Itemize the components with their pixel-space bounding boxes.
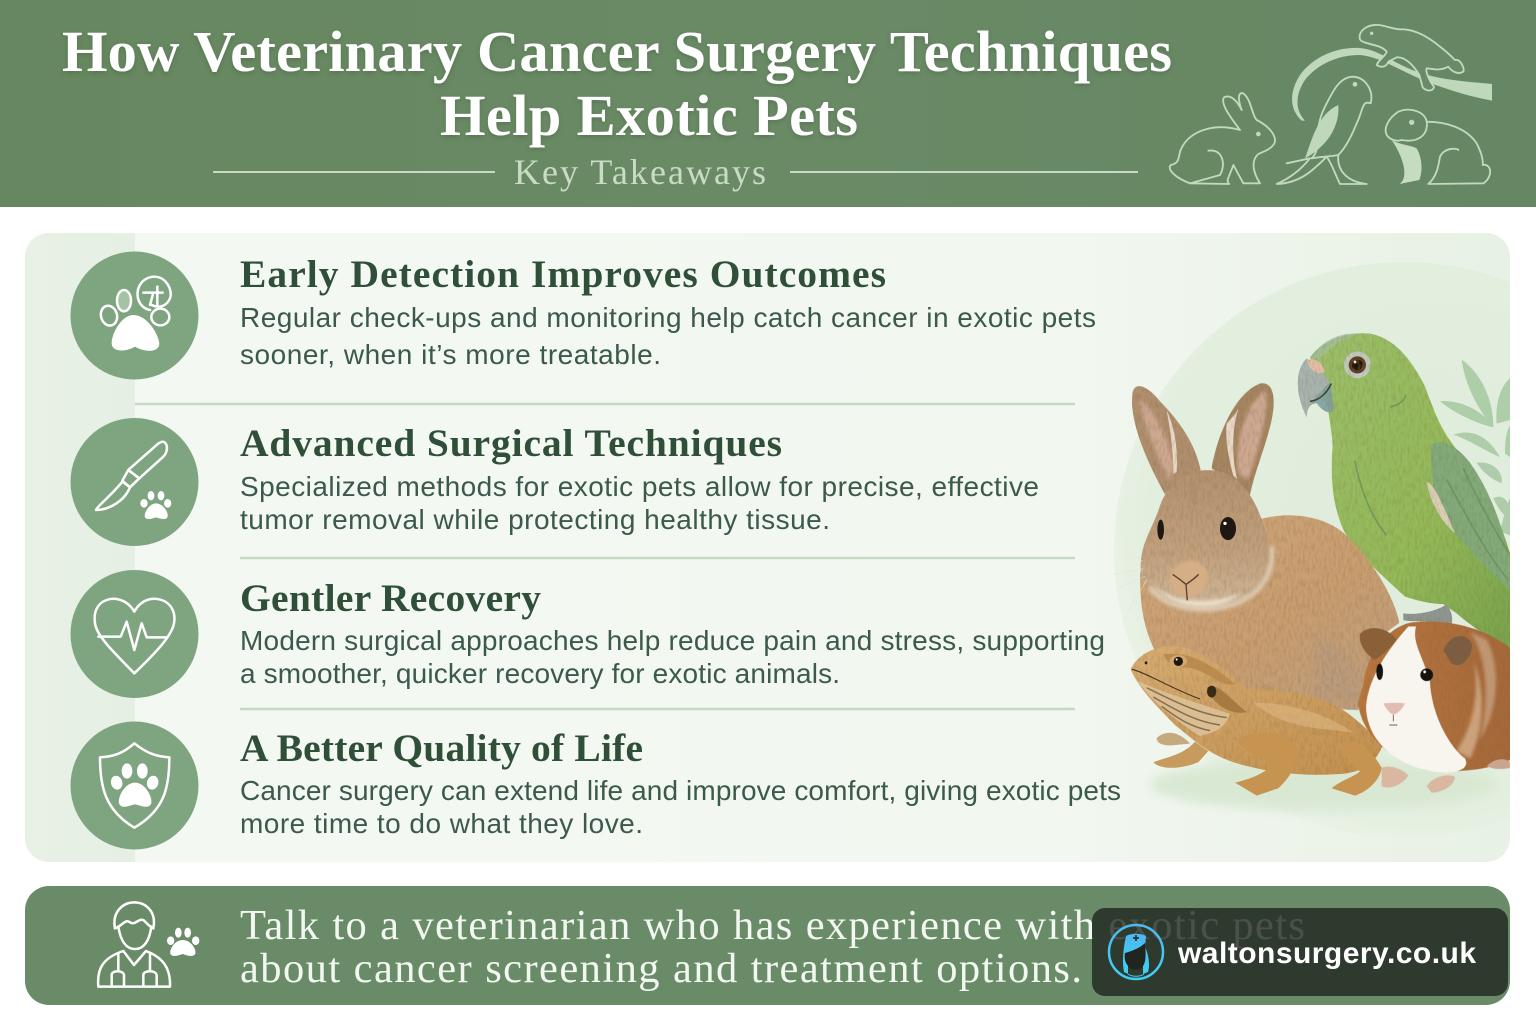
parrot	[1298, 333, 1513, 654]
icon: heart with pulse	[70, 570, 198, 698]
text block: Cancer surgery can extend life and improve comfort, giving exotic pets	[240, 775, 1121, 806]
illustration: rabbit, parrot, lizard and guinea pig	[1113, 262, 1536, 838]
watermark badge: waltonsurgery.co.uk: waltonsurgery.co.uk	[1177, 937, 1476, 970]
far legs	[1157, 733, 1190, 745]
text block: Regular check-ups and monitoring help catch cancer in exotic pets	[240, 302, 1096, 333]
heading: Advanced Surgical Techniques	[240, 421, 782, 465]
title: How Veterinary Cancer Surgery Techniques	[62, 19, 1172, 84]
rabbit outline	[1170, 93, 1275, 184]
icon: paw with magnifier	[70, 252, 198, 380]
title	[62, 19, 1172, 148]
icon: veterinarian with paw	[98, 902, 199, 987]
item 3: gentler recovery	[70, 570, 1105, 698]
text block: more time to do what they love.	[240, 808, 643, 839]
logo: nurse	[1109, 925, 1163, 979]
fern leaves	[1440, 360, 1510, 535]
bearded dragon	[1131, 646, 1383, 796]
guinea pig	[1358, 621, 1513, 793]
parrot outline	[1277, 77, 1371, 184]
text block: tumor removal while protecting healthy tissue.	[240, 504, 830, 535]
heading: Gentler Recovery	[240, 576, 541, 620]
call to action text: about cancer screening and treatment options.	[240, 945, 1082, 992]
item 4: quality of life	[70, 722, 1121, 850]
icon: scalpel and paw	[70, 418, 198, 546]
text block: Modern surgical approaches help reduce pain and stress, supporting	[240, 625, 1105, 656]
ground shadow	[1150, 758, 1497, 811]
panel: key takeaways	[25, 233, 1536, 862]
text block: a smoother, quicker recovery for exotic animals.	[240, 658, 840, 689]
item 2: advanced surgical techniques	[70, 418, 1039, 546]
text block: sooner, when it’s more treatable.	[240, 339, 661, 370]
icon: shield with paw	[70, 722, 198, 850]
header line art: exotic pets	[1170, 25, 1492, 184]
text block	[240, 471, 1039, 535]
branch	[1292, 48, 1492, 121]
text block	[240, 775, 1121, 839]
text block	[240, 625, 1105, 689]
header banner	[0, 0, 1536, 207]
heading: A Better Quality of Life	[240, 726, 643, 770]
text block: Specialized methods for exotic pets allow for precise, effective	[240, 471, 1039, 502]
footer call to action	[25, 886, 1510, 1005]
front legs	[1235, 733, 1298, 796]
rabbit	[1113, 383, 1399, 710]
text block	[240, 302, 1096, 370]
call to action text: Talk to a veterinarian who has experience with exotic pets	[240, 902, 1305, 949]
guinea pig outline	[1386, 110, 1490, 184]
title: Help Exotic Pets	[440, 83, 858, 148]
heading: Early Detection Improves Outcomes	[240, 252, 886, 296]
watermark badge: waltonsurgery.co.uk	[1092, 908, 1508, 996]
call to action text	[240, 902, 1305, 992]
item 1: early detection	[70, 252, 1096, 380]
lizard outline	[1360, 25, 1464, 91]
subtitle: key takeaways: Key Takeaways	[514, 152, 766, 192]
